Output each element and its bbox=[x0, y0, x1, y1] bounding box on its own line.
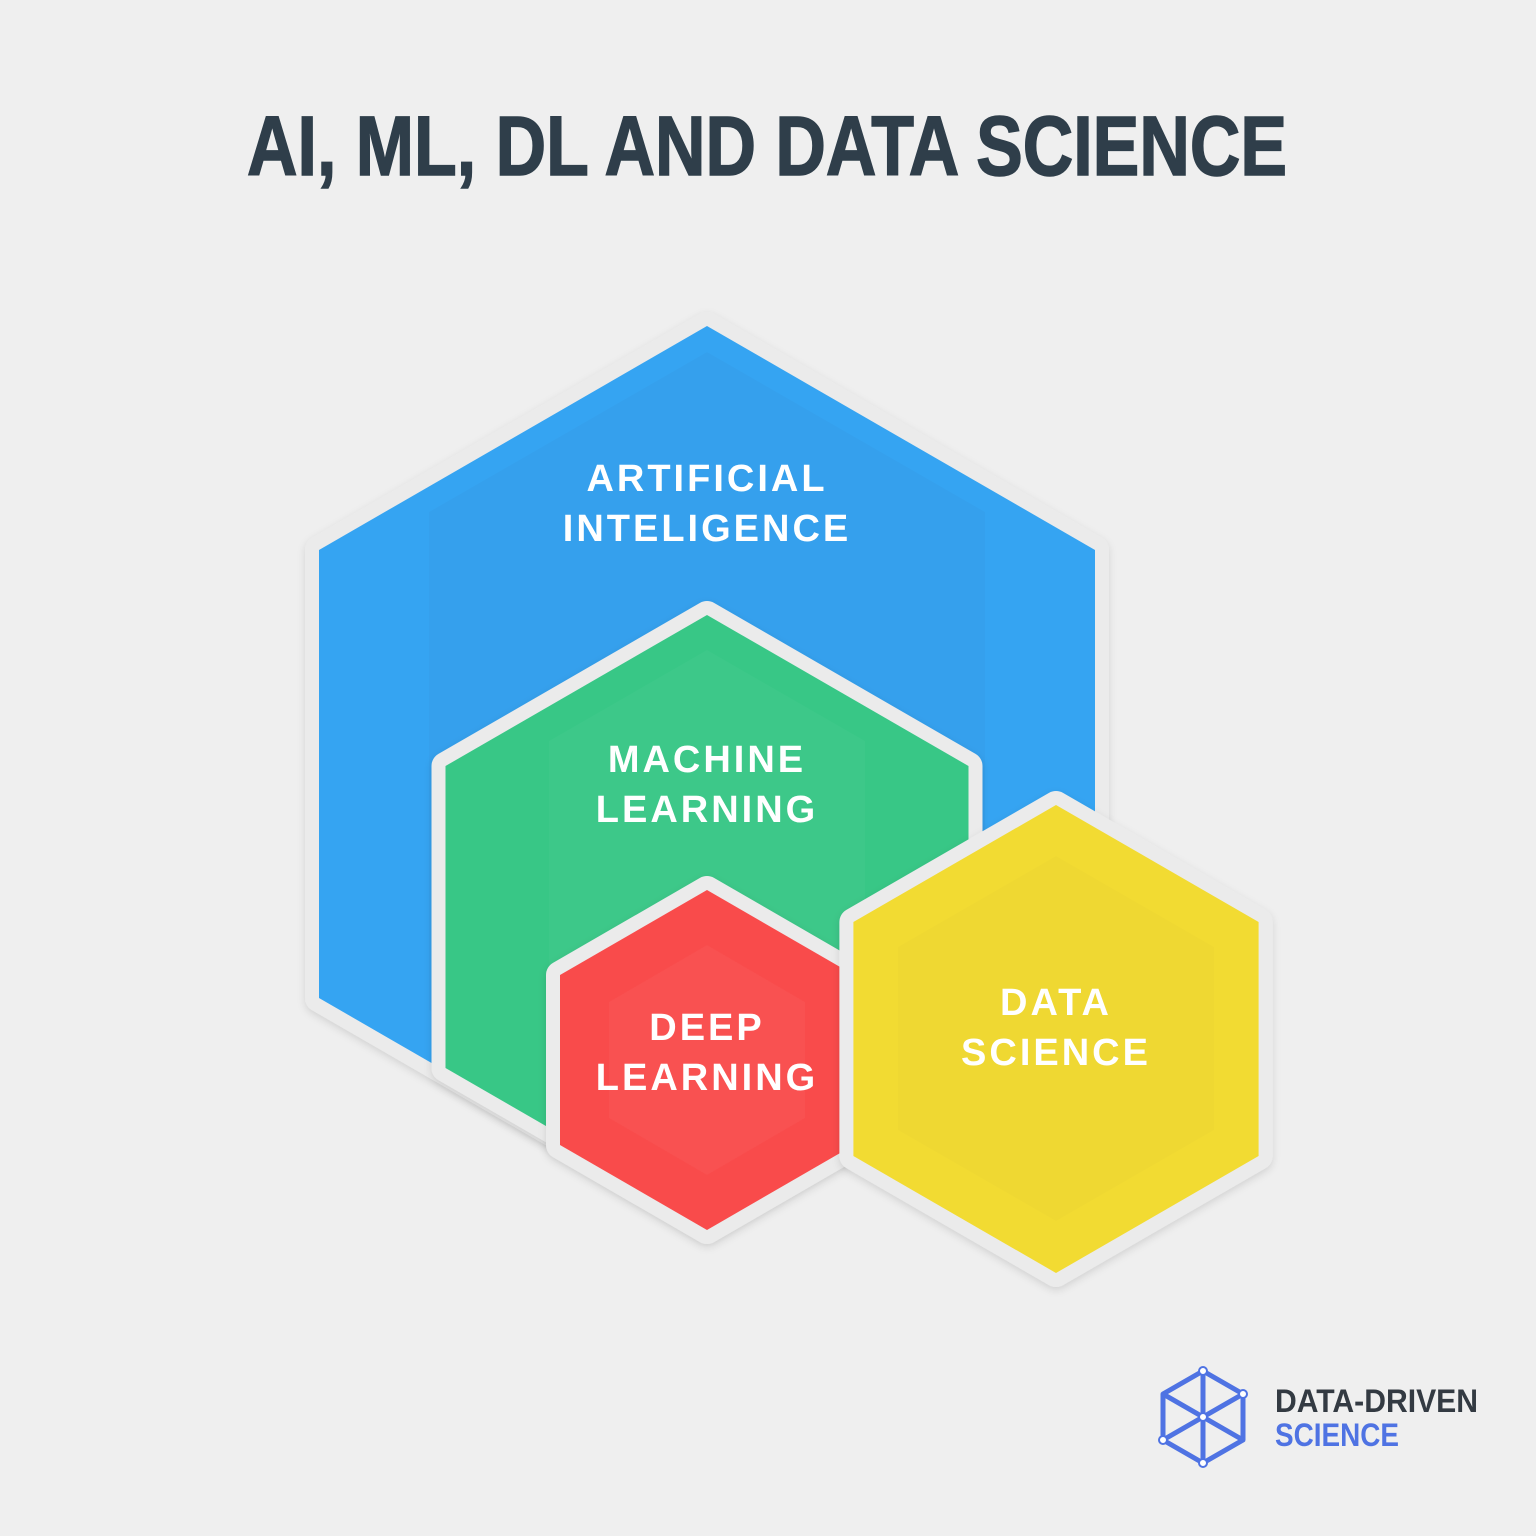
hexagon: machine learning bbox=[446, 615, 968, 1219]
logo: SCIENCE bbox=[1275, 1417, 1399, 1453]
hexagon: machine learning: LEARNING bbox=[596, 789, 818, 831]
hexagon: deep learning bbox=[560, 890, 854, 1230]
hexagon: deep learning: DEEP bbox=[649, 1007, 765, 1049]
hexagon: deep learning: LEARNING bbox=[596, 1057, 818, 1099]
hexagon: artificial intelligence: INTELIGENCE bbox=[563, 508, 851, 550]
hexagon: data science: DATA bbox=[1000, 982, 1112, 1024]
logo text: DATA-DRIVEN bbox=[1275, 1383, 1478, 1419]
hexagon: artificial intelligence: ARTIFICIAL bbox=[586, 458, 828, 500]
title: AI, ML, DL AND DATA SCIENCE bbox=[247, 99, 1287, 193]
hexagon: data science: SCIENCE bbox=[961, 1032, 1151, 1074]
icon: hexagon cube bbox=[1159, 1367, 1247, 1467]
hexagon: machine learning: MACHINE bbox=[608, 739, 806, 781]
logo bbox=[1159, 1367, 1478, 1467]
hexagon: data science bbox=[853, 805, 1259, 1273]
hexagon: artificial intelligence bbox=[319, 326, 1095, 1222]
